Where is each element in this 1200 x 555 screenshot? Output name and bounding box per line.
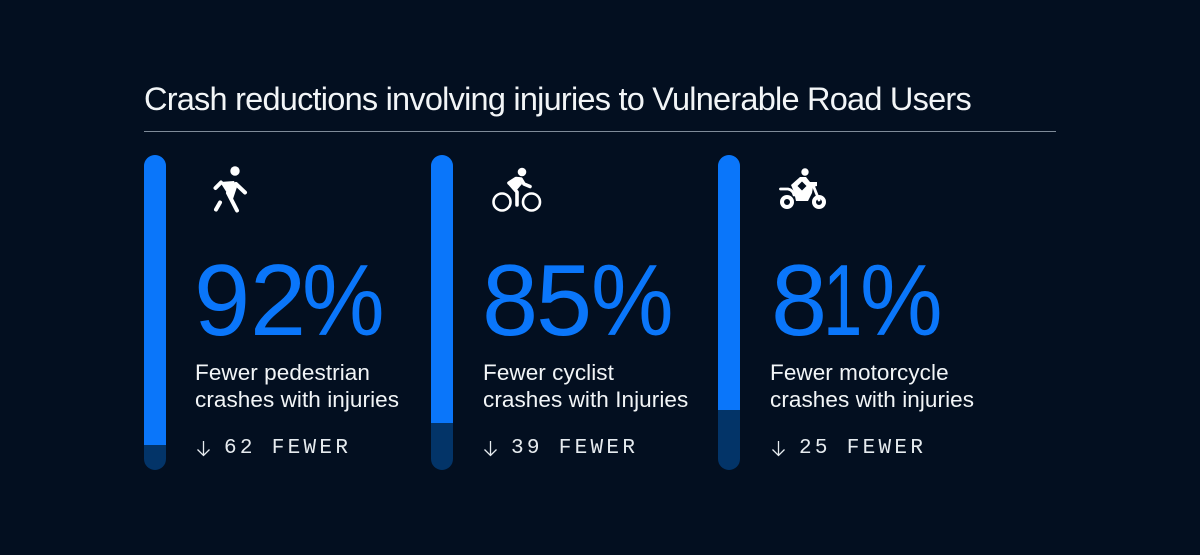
arrow: down <box>484 441 497 456</box>
label: cyclist <box>483 360 688 412</box>
stat: 92%: % <box>302 245 385 357</box>
arrow: down <box>197 441 210 456</box>
label: pedestrian: Fewer pedestrian <box>195 360 370 385</box>
icon: pedestrian <box>213 166 248 213</box>
icon: motorcycle <box>779 168 826 209</box>
stat: 92%: 9 <box>194 245 250 357</box>
count: 62 fewer: 62 FEWER <box>224 437 351 460</box>
stat: 81%: 8 <box>771 245 827 357</box>
progress bar: 85% <box>431 155 453 470</box>
stat: 85%: 8 <box>482 245 538 357</box>
label: motorcycle <box>770 360 974 412</box>
count: 25 fewer: 25 FEWER <box>799 437 926 460</box>
arrow: down <box>772 441 785 456</box>
stat: 92% <box>194 245 385 357</box>
progress bar: 81% <box>718 155 740 470</box>
label: cyclist: crashes with Injuries <box>483 387 688 412</box>
stat: 81%: % <box>860 245 943 357</box>
progress bar: 92% <box>144 155 166 470</box>
label: pedestrian <box>195 360 399 412</box>
label: motorcycle: Fewer motorcycle <box>770 360 949 385</box>
label: cyclist: Fewer cyclist <box>483 360 614 385</box>
stat: 92%: 2 <box>250 245 306 357</box>
label: pedestrian: crashes with injuries <box>195 387 399 412</box>
count: 39 fewer: 39 FEWER <box>511 437 638 460</box>
stat: 85% <box>482 245 674 357</box>
stat: 81%: 1 <box>823 245 862 357</box>
stat: 85%: 5 <box>536 245 592 357</box>
icon: cyclist <box>492 168 542 212</box>
label: motorcycle: crashes with injuries <box>770 387 974 412</box>
title: Crash reductions involving injuries to Vulnerable Road Users <box>144 81 971 117</box>
stat: 85%: % <box>591 245 674 357</box>
stat: 81% <box>771 245 943 357</box>
